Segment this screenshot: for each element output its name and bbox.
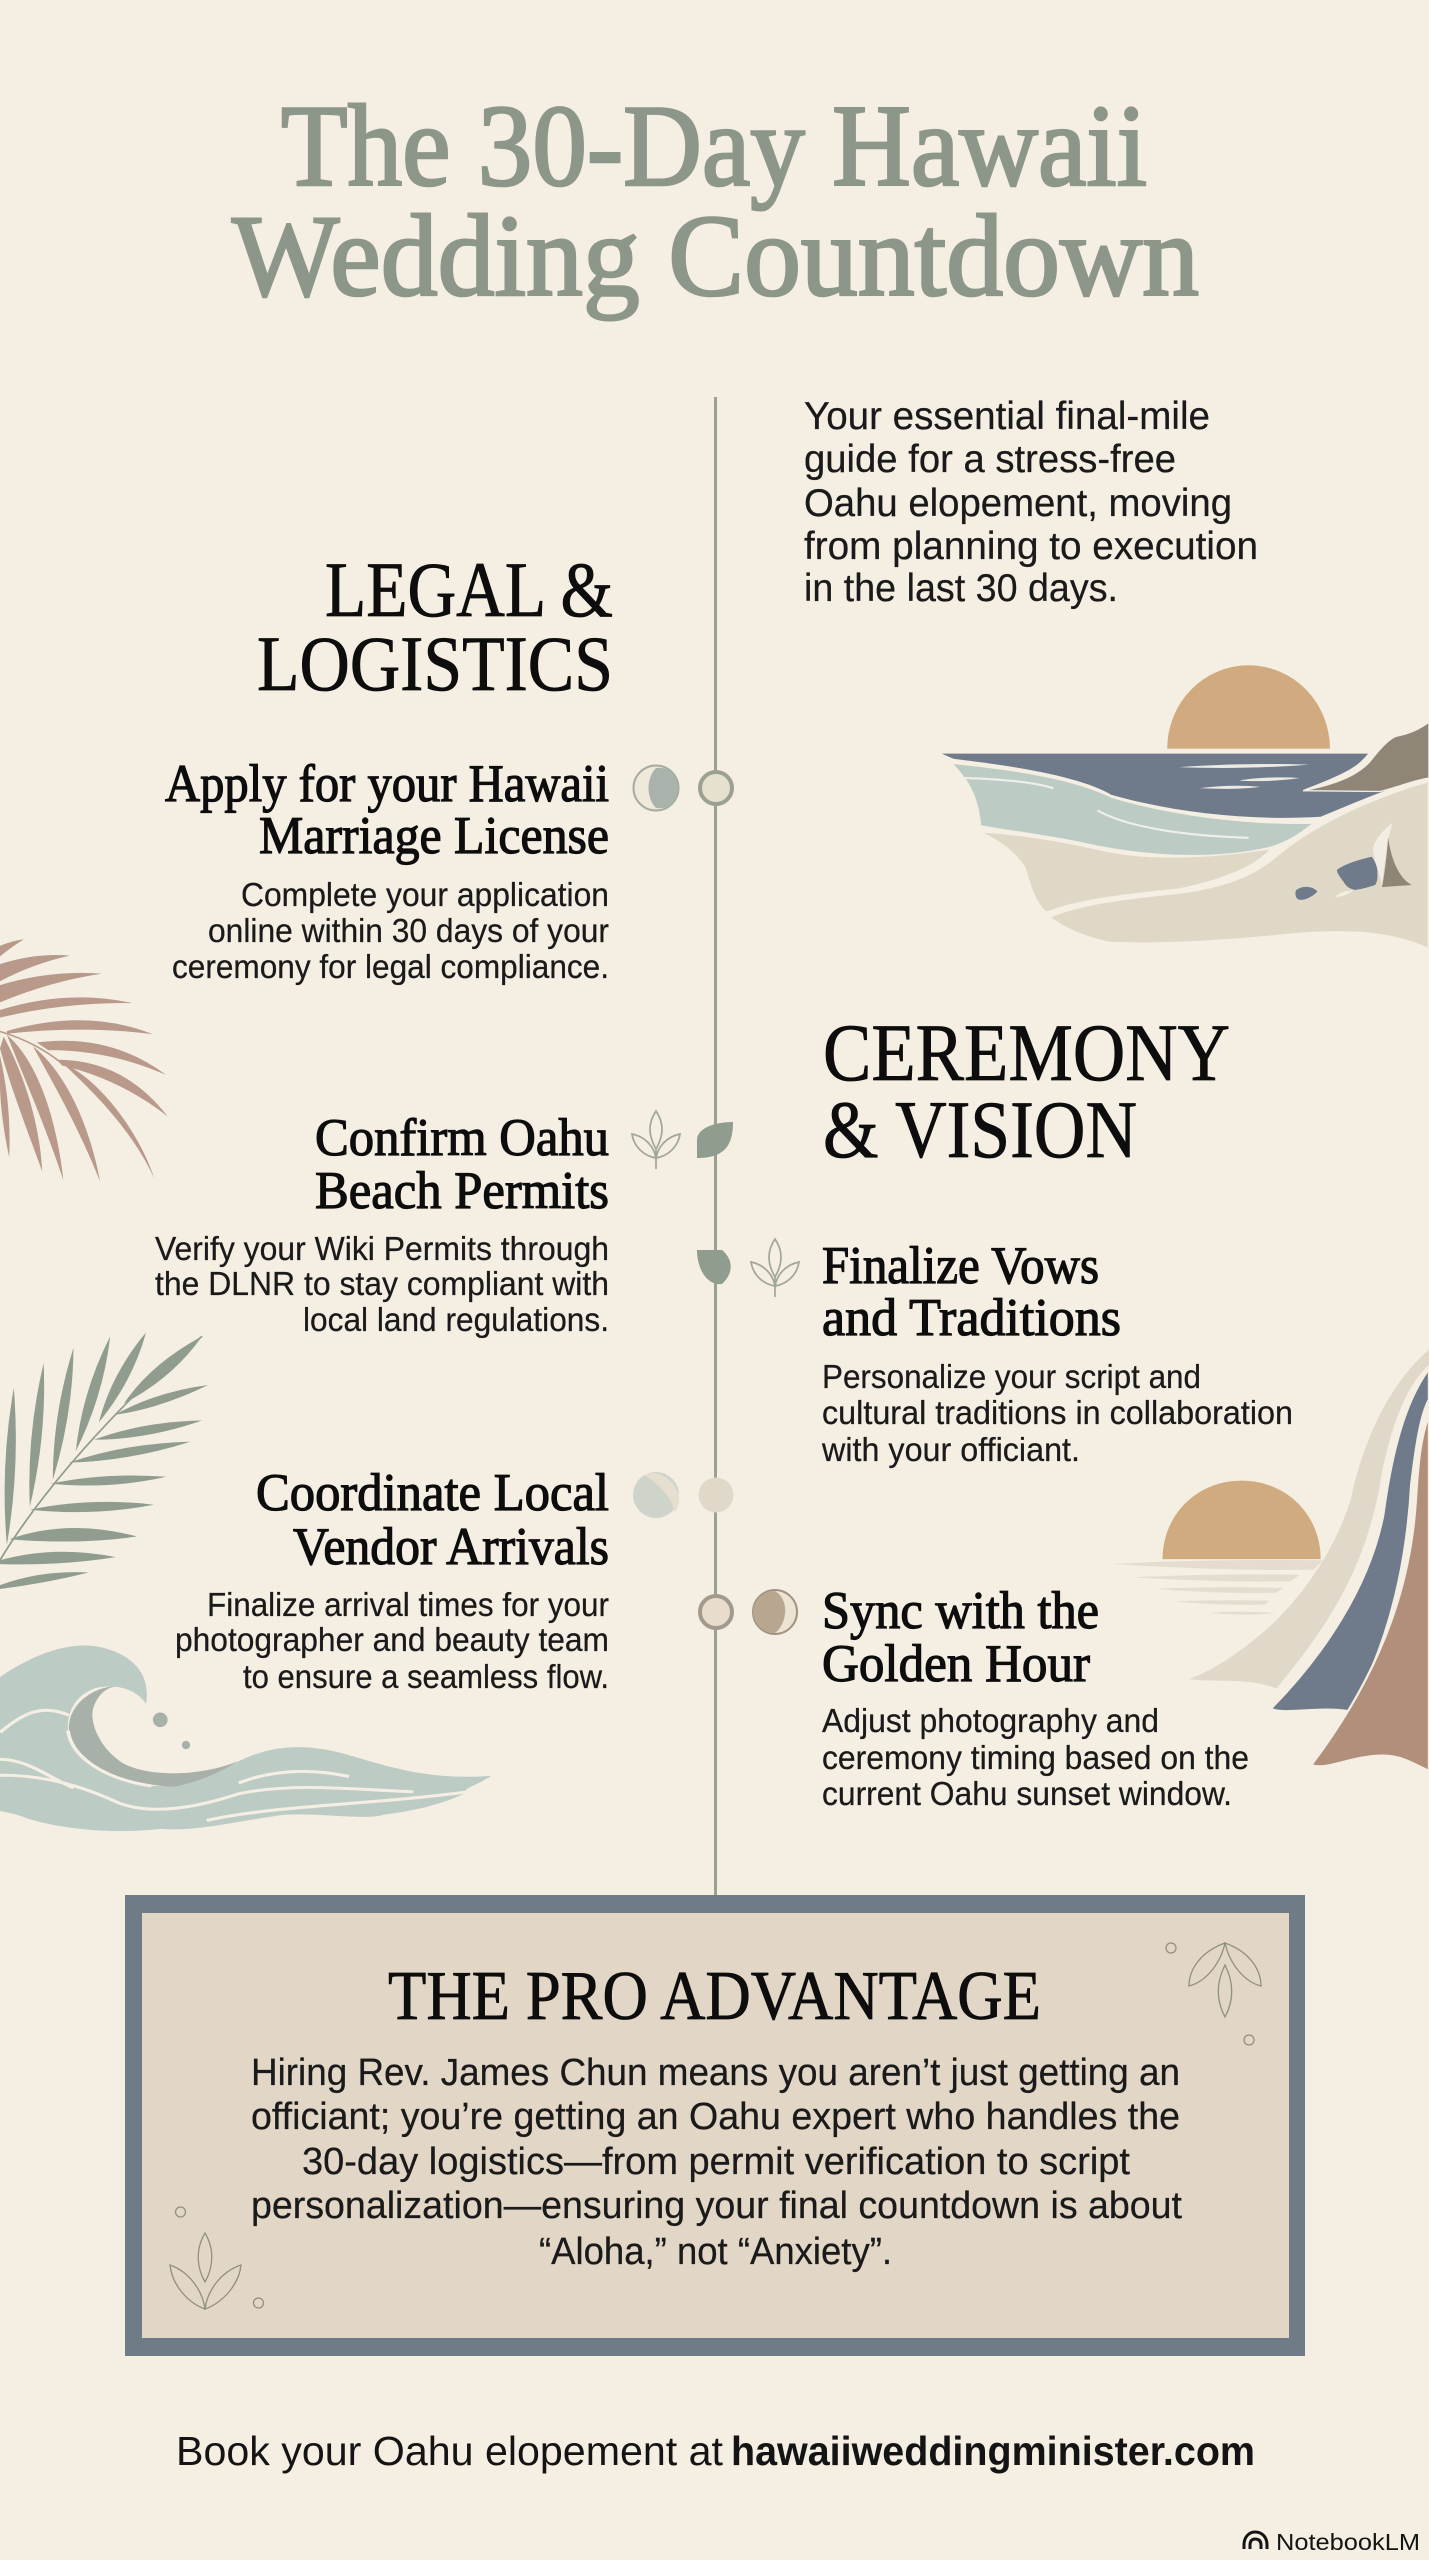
- panel: the pro advantage: [125, 1895, 1305, 2356]
- icon: moon: [753, 1590, 797, 1634]
- step description: Adjust photography and: [822, 1702, 1159, 1739]
- step heading: Finalize Vows: [822, 1237, 1099, 1295]
- step: finalize vows: [697, 1237, 1293, 1468]
- panel body text: 30-day logistics—from permit verification to script: [302, 2141, 1130, 2183]
- panel body text: [251, 2052, 1182, 2273]
- step heading: Sync with the: [822, 1582, 1099, 1640]
- illustration: brown palm frond: [0, 939, 168, 1181]
- section heading: ceremony and vision: & VISION: [823, 1084, 1137, 1175]
- intro text: Your essential final-mile: [804, 395, 1210, 438]
- step description: Finalize arrival times for your: [207, 1586, 609, 1623]
- step heading: Vendor Arrivals: [293, 1518, 609, 1576]
- step description: [822, 1702, 1249, 1812]
- step description: online within 30 days of your: [208, 912, 609, 949]
- intro text: guide for a stress-free: [804, 438, 1176, 481]
- illustration: sunset with draped fabric: [1114, 1350, 1429, 1771]
- icon: moon: [634, 766, 678, 810]
- step: apply for marriage license: [165, 755, 732, 985]
- step: coordinate vendors: [175, 1464, 734, 1695]
- step: confirm beach permits: [155, 1109, 733, 1338]
- intro text: Oahu elopement, moving: [804, 482, 1232, 525]
- timeline marker: leaf: [697, 1122, 733, 1158]
- timeline marker: [700, 772, 732, 804]
- illustration: ocean wave: [0, 1646, 491, 1831]
- step heading: [315, 1109, 609, 1220]
- step description: Complete your application: [241, 876, 609, 913]
- step description: ceremony for legal compliance.: [172, 948, 609, 985]
- section heading: ceremony and vision: [823, 1007, 1230, 1175]
- panel body text: “Aloha,” not “Anxiety”.: [539, 2231, 892, 2273]
- step: golden hour: [700, 1582, 1249, 1812]
- step description: with your officiant.: [821, 1431, 1080, 1468]
- title: [232, 82, 1199, 321]
- step description: ceremony timing based on the: [822, 1739, 1249, 1776]
- panel body text: personalization—ensuring your final countdown is about: [251, 2185, 1182, 2227]
- icon: sprout: [632, 1111, 680, 1169]
- timeline marker: [700, 1596, 732, 1628]
- timeline spine: [714, 397, 717, 1895]
- step description: cultural traditions in collaboration: [822, 1394, 1293, 1431]
- step heading: and Traditions: [822, 1289, 1121, 1347]
- step heading: Golden Hour: [822, 1635, 1090, 1693]
- icon: sprout bottom left: [170, 2207, 264, 2309]
- title: Wedding Countdown: [232, 192, 1199, 321]
- icon: moon: [633, 1472, 679, 1518]
- step heading: [822, 1582, 1099, 1693]
- step description: [821, 1358, 1293, 1468]
- step heading: Confirm Oahu: [315, 1109, 609, 1167]
- step description: the DLNR to stay compliant with: [155, 1265, 609, 1302]
- step description: local land regulations.: [303, 1301, 609, 1338]
- step heading: Marriage License: [259, 807, 609, 865]
- illustration: beach with setting sun: [942, 665, 1429, 949]
- icon: sprout: [751, 1239, 799, 1297]
- illustration: green palm frond: [0, 1333, 208, 1589]
- step heading: Apply for your Hawaii: [165, 755, 609, 813]
- section heading: legal and logistics: LOGISTICS: [257, 620, 613, 707]
- notebooklm watermark: NotebookLM: [1276, 2529, 1420, 2555]
- step description: Personalize your script and: [822, 1358, 1201, 1395]
- panel heading: THE PRO ADVANTAGE: [388, 1958, 1041, 2035]
- step heading: Coordinate Local: [256, 1464, 609, 1522]
- step description: Verify your Wiki Permits through: [155, 1230, 609, 1267]
- step description: [155, 1230, 609, 1338]
- title: The 30-Day Hawaii: [281, 82, 1147, 211]
- step description: current Oahu sunset window.: [822, 1775, 1232, 1812]
- section heading: ceremony and vision: CEREMONY: [823, 1007, 1230, 1098]
- panel body text: Hiring Rev. James Chun means you aren’t just getting an: [251, 2052, 1180, 2094]
- timeline marker: [698, 1478, 734, 1512]
- intro text: from planning to execution: [804, 525, 1258, 568]
- footer call to action: hawaiiweddingminister.com: [731, 2428, 1255, 2474]
- step heading: Beach Permits: [315, 1162, 609, 1220]
- step description: to ensure a seamless flow.: [243, 1658, 609, 1695]
- icon: sprout top right: [1166, 1943, 1261, 2045]
- intro text: [804, 395, 1258, 610]
- step description: [175, 1586, 609, 1695]
- footer call to action: [176, 2428, 1255, 2474]
- section heading: legal and logistics: LEGAL &: [325, 546, 613, 633]
- step heading: [165, 755, 609, 865]
- step heading: [256, 1464, 609, 1576]
- timeline marker: leaf: [697, 1250, 731, 1284]
- footer call to action: Book your Oahu elopement at: [176, 2428, 724, 2474]
- step description: [172, 876, 609, 985]
- step description: photographer and beauty team: [175, 1621, 609, 1658]
- section heading: legal and logistics: [257, 546, 613, 707]
- panel body text: officiant; you’re getting an Oahu expert who handles the: [251, 2096, 1180, 2138]
- step heading: [822, 1237, 1121, 1347]
- intro text: in the last 30 days.: [804, 567, 1118, 610]
